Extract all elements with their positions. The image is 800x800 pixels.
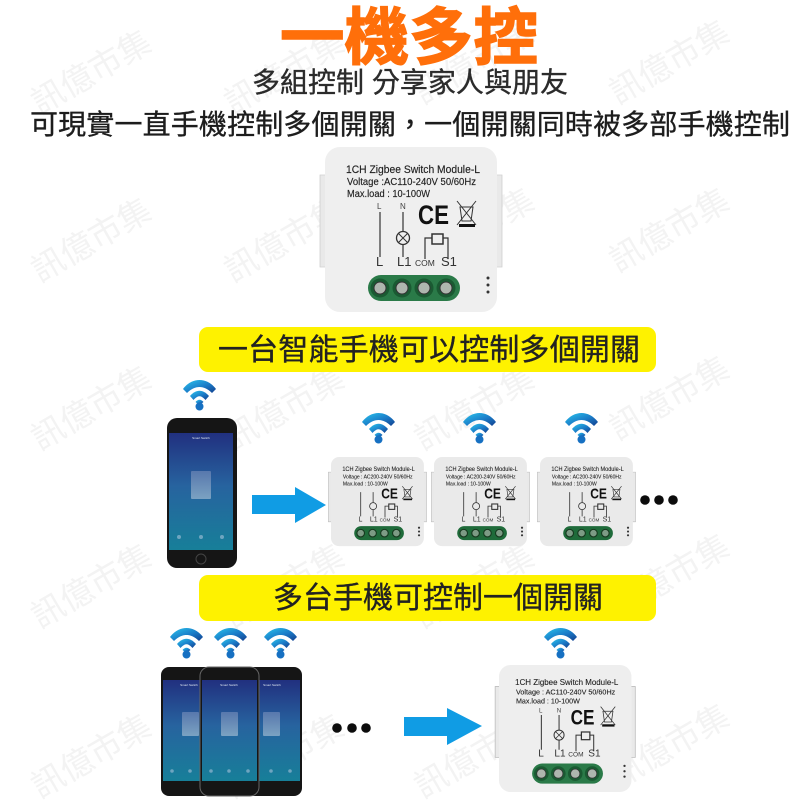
ellipsis dots: more phones bbox=[332, 723, 371, 733]
switch module: bottom: CE bbox=[571, 706, 595, 729]
switch module 1: S1 bbox=[394, 516, 402, 523]
switch module 2: Voltage : AC200-240V 50/60Hz bbox=[446, 475, 516, 481]
watermark pattern: 訊億市集 bbox=[404, 174, 542, 282]
watermark pattern: 訊億市集 bbox=[599, 690, 737, 798]
watermark pattern: 訊億市集 bbox=[21, 184, 159, 292]
icon: wifi 1 bbox=[362, 413, 395, 444]
switch module 2: L1 bbox=[473, 516, 481, 523]
title: 一機多控 bbox=[280, 4, 538, 73]
switch module 1: L1 bbox=[370, 516, 378, 523]
switch module 3: Max.load : 10-100W bbox=[552, 482, 598, 488]
banner: one phone controls many switches: 一台智能手機可以控制多個開關 bbox=[218, 334, 640, 367]
switch module: bottom bbox=[495, 665, 635, 792]
watermark pattern: 訊億市集 bbox=[214, 16, 352, 124]
phones group: Smart Switch bbox=[263, 683, 281, 687]
arrow: phones to switch bbox=[404, 708, 482, 745]
watermark pattern: 訊億市集 bbox=[21, 16, 159, 124]
subtitle: 多組控制 分享家人與朋友 bbox=[252, 67, 568, 98]
switch module 1: Voltage : AC200-240V 50/60Hz bbox=[343, 475, 413, 481]
switch module: bottom: Max.load : 10-100W bbox=[516, 697, 581, 705]
switch module 2: COM bbox=[483, 517, 493, 522]
switch module 1: CE bbox=[381, 487, 398, 503]
watermark pattern: 訊億市集 bbox=[404, 530, 542, 638]
switch module: main: COM bbox=[415, 258, 435, 268]
switch module: bottom: COM bbox=[568, 752, 584, 759]
switch module: bottom: 1CH Zigbee Switch Module-L bbox=[515, 677, 619, 687]
phone bbox=[167, 418, 237, 568]
switch module 2: 1CH Zigbee Switch Module-L bbox=[445, 467, 518, 473]
switch module 2: CE bbox=[484, 487, 501, 503]
switch module: main: L bbox=[376, 254, 383, 269]
phones group: Smart Switch bbox=[180, 683, 198, 687]
phones group: Smart Switch bbox=[220, 683, 238, 687]
switch module: bottom: L1 bbox=[554, 749, 566, 760]
banner: one phone controls many switches bbox=[199, 327, 656, 372]
switch module 2 bbox=[431, 457, 530, 546]
phones group bbox=[161, 667, 302, 796]
switch module 3: L bbox=[568, 516, 572, 523]
switch module: main: Voltage :AC110-240V 50/60Hz bbox=[347, 177, 476, 188]
watermark pattern: 訊億市集 bbox=[214, 530, 352, 638]
switch module: bottom: N bbox=[557, 708, 561, 715]
ellipsis dots: more switches bbox=[640, 495, 678, 505]
switch module: main: Max.load : 10-100W bbox=[347, 189, 431, 200]
watermark pattern: 訊億市集 bbox=[599, 520, 737, 628]
switch module: bottom: L bbox=[539, 708, 543, 715]
switch module: main: S1 bbox=[441, 254, 457, 269]
switch module 1: 1CH Zigbee Switch Module-L bbox=[342, 467, 415, 473]
watermark pattern: 訊億市集 bbox=[599, 342, 737, 450]
icon: wifi above switch bbox=[544, 628, 577, 658]
icon: wifi phone 3 bbox=[264, 628, 297, 658]
switch module: bottom: S1 bbox=[588, 749, 601, 760]
phone: Smart Switch bbox=[192, 436, 210, 440]
switch module 3: CE bbox=[590, 487, 607, 503]
watermark pattern: 訊億市集 bbox=[21, 530, 159, 638]
watermark pattern: 訊億市集 bbox=[214, 352, 352, 460]
watermark pattern: 訊億市集 bbox=[599, 6, 737, 114]
switch module 1: COM bbox=[380, 517, 390, 522]
switch module: main: L1 bbox=[397, 254, 411, 269]
watermark pattern: 訊億市集 bbox=[214, 184, 352, 292]
switch module 2: Max.load : 10-100W bbox=[446, 482, 492, 488]
switch module 1 bbox=[328, 457, 427, 546]
switch module: bottom: Voltage : AC110-240V 50/60Hz bbox=[516, 687, 615, 696]
arrow: phone to switches bbox=[252, 487, 326, 523]
icon: wifi 3 bbox=[565, 413, 598, 444]
watermark pattern: 訊億市集 bbox=[404, 352, 542, 460]
icon: wifi above phone bbox=[183, 380, 216, 410]
switch module: main: 1CH Zigbee Switch Module-L bbox=[346, 164, 480, 176]
switch module 3: 1CH Zigbee Switch Module-L bbox=[551, 467, 624, 473]
banner: many phones control one switch: 多台手機可控制一個開關 bbox=[273, 582, 603, 615]
icon: wifi phone 1 bbox=[170, 628, 203, 658]
banner: many phones control one switch bbox=[199, 575, 656, 621]
switch module: main bbox=[320, 147, 502, 312]
description line: 可現實一直手機控制多個開關，一個開關同時被多部手機控制 bbox=[30, 109, 790, 140]
switch module: bottom: L bbox=[538, 749, 544, 760]
switch module 2: S1 bbox=[497, 516, 505, 523]
switch module 3 bbox=[537, 457, 636, 546]
icon: wifi 2 bbox=[463, 413, 496, 444]
watermark pattern: 訊億市集 bbox=[599, 174, 737, 282]
switch module 2: L bbox=[462, 516, 466, 523]
icon: wifi phone 2 bbox=[214, 628, 247, 658]
switch module 3: COM bbox=[589, 517, 599, 522]
switch module: main: CE bbox=[418, 200, 449, 230]
switch module 1: L bbox=[359, 516, 363, 523]
watermark pattern: 訊億市集 bbox=[404, 6, 542, 114]
switch module 3: S1 bbox=[603, 516, 611, 523]
switch module 3: Voltage : AC200-240V 50/60Hz bbox=[552, 475, 622, 481]
switch module 1: Max.load : 10-100W bbox=[343, 482, 389, 488]
switch module 3: L1 bbox=[579, 516, 587, 523]
switch module: main: N bbox=[400, 202, 406, 211]
switch module: main: L bbox=[377, 202, 382, 211]
watermark pattern: 訊億市集 bbox=[21, 352, 159, 460]
